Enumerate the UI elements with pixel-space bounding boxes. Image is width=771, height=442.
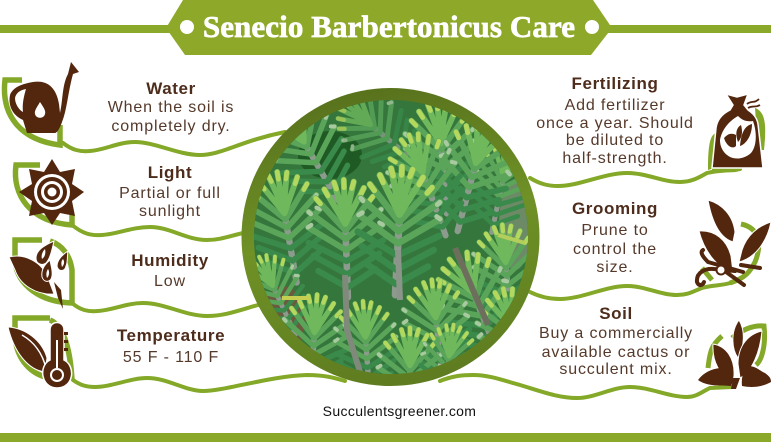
connector curve: fertilizing [530,169,740,186]
text: fertilizing line 2: once a year. Should [536,115,694,132]
connector curve: temperature and soil [73,375,732,398]
title banner [166,0,612,55]
central photo: succulent foliage [242,88,540,386]
footer website: Succulentsgreener.com [323,403,476,419]
text: soil line 2: available cactus or [542,344,690,361]
connector curve: light [72,225,243,240]
icon: plant in soil [698,320,771,389]
connector curve: water [63,132,285,155]
heading: fertilizing: Fertilizing [572,74,658,93]
text: water line 2: completely dry. [111,118,231,135]
connector curve: humidity [72,303,258,316]
panel: water [4,62,234,145]
icon: leaf and thermometer [8,318,72,388]
icon: leaves and shears [697,200,771,285]
text: grooming line 3: size. [596,259,634,276]
text: soil line 3: succulent mix. [559,361,673,378]
panel: fertilizing [536,74,765,172]
text: fertilizing: Add fertilizer [565,97,665,114]
text: fertilizing line 3: be diluted to [566,132,664,149]
heading: temperature: Temperature [117,326,225,345]
panel: grooming [572,199,771,285]
connector curve: grooming [530,283,730,299]
panel: temperature [8,318,225,388]
heading: light: Light [148,163,192,182]
icon: fertilizer bag [708,94,765,172]
heading: soil: Soil [599,304,633,323]
text: temperature: 55 F - 110 F [123,349,219,366]
icon: sun [15,159,84,225]
title banner: Senecio Barbertonicus Care [203,9,575,44]
panel: humidity [9,240,209,309]
top rule [0,25,771,33]
text: grooming: Prune to [581,222,649,239]
panel: light [15,159,221,225]
text: water: When the soil is [108,99,234,116]
text: fertilizing line 4: half-strength. [562,150,668,167]
text: light line 2: sunlight [139,203,201,220]
heading: water: Water [146,79,196,98]
heading: humidity: Humidity [131,251,209,270]
icon: watering can [4,62,79,145]
heading: grooming: Grooming [572,199,658,218]
text: grooming line 2: control the [573,241,657,258]
text: light: Partial or full [119,185,221,202]
panel: soil [539,304,771,389]
text: soil: Buy a commercially [539,325,693,342]
bottom rule [0,433,771,442]
icon: leaf and drops [9,240,72,309]
text: humidity: Low [154,273,186,290]
